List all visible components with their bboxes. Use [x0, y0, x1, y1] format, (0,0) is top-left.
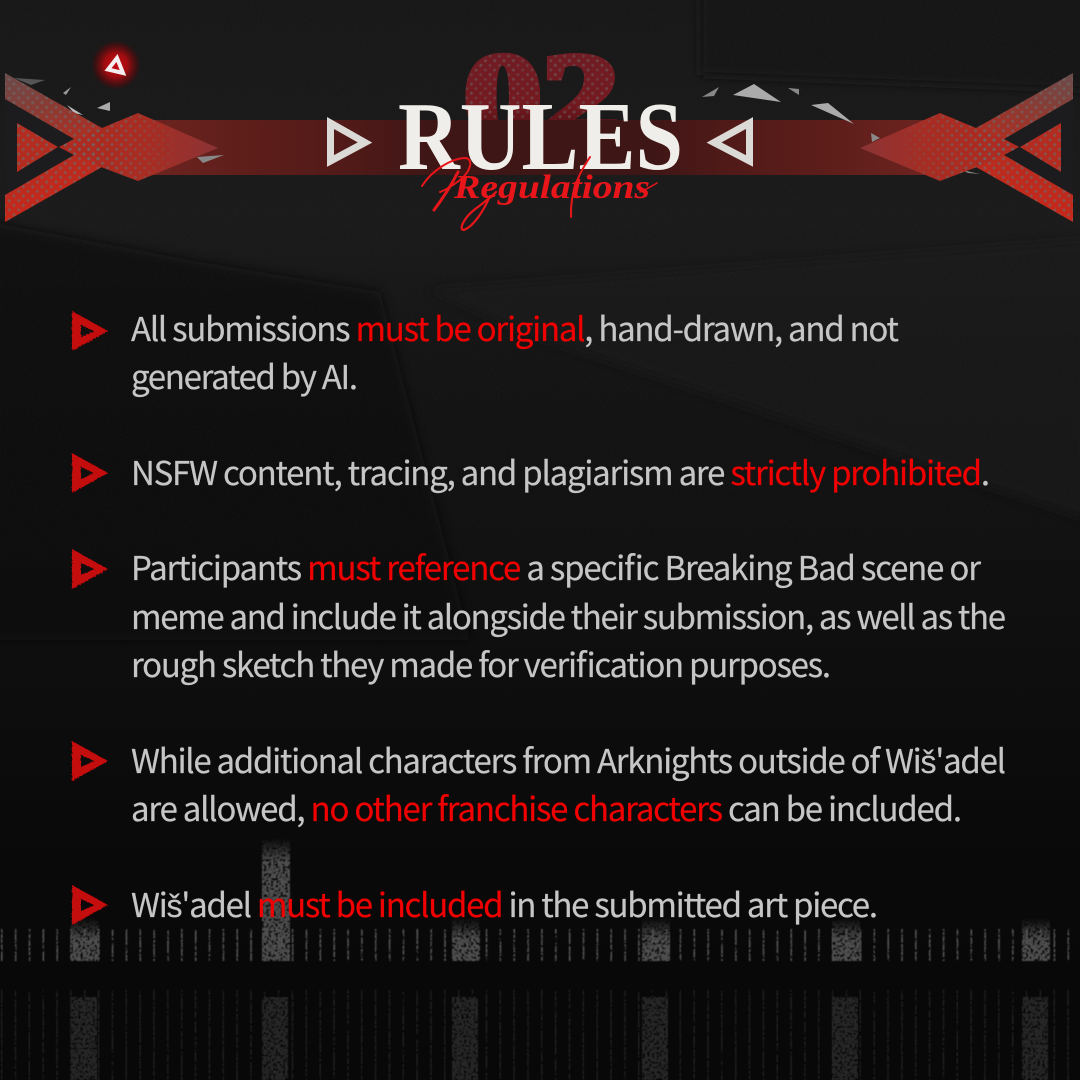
text: are allowed, no other franchise characters can be included.	[131, 783, 962, 831]
text: rough sketch they made for verification purposes.	[131, 639, 831, 687]
icon: glowing triangle	[90, 39, 142, 91]
red strip	[150, 120, 930, 175]
header banner	[5, 29, 1073, 230]
text	[131, 303, 899, 399]
icon: bullet	[72, 885, 108, 925]
left emblem	[5, 73, 218, 222]
number 02: 02	[464, 29, 619, 162]
icon: bullet	[72, 311, 108, 351]
subtitle	[422, 157, 657, 230]
text	[131, 735, 1006, 831]
rule 5	[72, 879, 878, 927]
subtitle: Regulations	[453, 169, 650, 206]
text: meme and include it alongside their submission, as well as the	[131, 591, 1006, 639]
right emblem	[860, 73, 1073, 222]
text: Participants must reference a specific Breaking Bad scene or	[131, 542, 981, 590]
rule 1	[72, 303, 899, 399]
number 02: 02	[464, 29, 619, 162]
text: generated by AI.	[131, 351, 358, 399]
title: RULES	[398, 83, 683, 190]
text: All submissions must be original, hand-drawn, and not	[131, 303, 899, 351]
icon: bullet	[72, 549, 108, 589]
icon: right outlined triangle	[714, 123, 750, 161]
text	[131, 542, 1006, 687]
icon: bullet	[72, 453, 108, 493]
shards right	[702, 84, 980, 174]
text: Wiš'adel must be included in the submitted art piece.	[131, 879, 878, 927]
icon: left outlined triangle	[330, 123, 365, 161]
shards left	[14, 78, 224, 163]
text: While additional characters from Arknights outside of Wiš'adel	[131, 735, 1006, 783]
rule 2	[72, 447, 990, 495]
icon: bullet	[72, 741, 108, 781]
barcode texture	[0, 838, 1080, 1080]
text: NSFW content, tracing, and plagiarism are strictly prohibited.	[131, 447, 990, 495]
rule 3	[72, 542, 1006, 687]
rule 4	[72, 735, 1006, 831]
